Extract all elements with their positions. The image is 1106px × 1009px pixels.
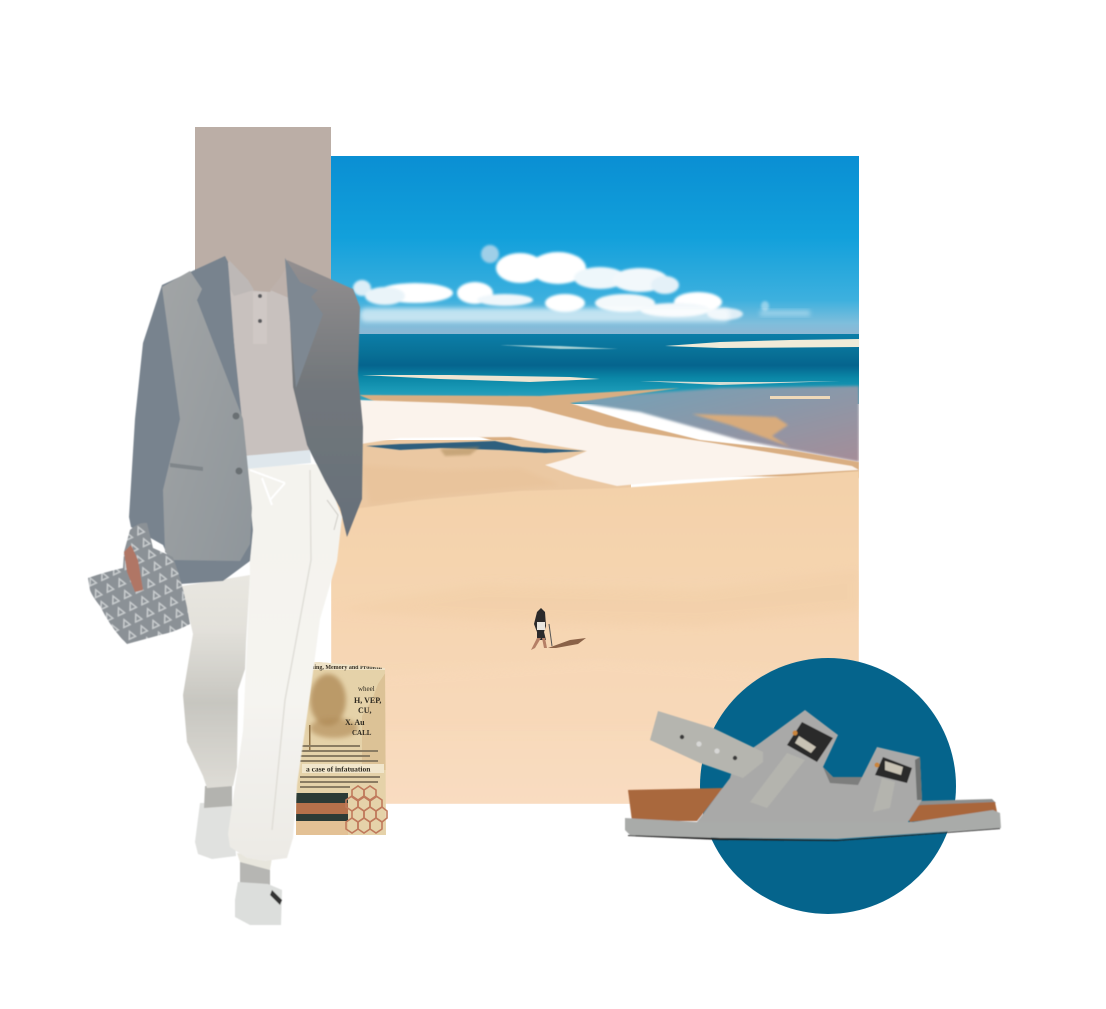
paper collage — [296, 660, 387, 836]
right blazer side — [287, 260, 363, 537]
front cork — [905, 802, 997, 822]
pants crease — [272, 470, 311, 830]
buckle two — [874, 757, 912, 783]
clipping text: ning, Memory and Problem — [311, 665, 382, 671]
white sand — [359, 400, 859, 486]
hiker — [531, 608, 586, 650]
shallow water — [560, 386, 859, 462]
polo collar — [228, 260, 289, 344]
low cloud band — [360, 301, 810, 322]
buttons — [232, 412, 242, 474]
left sandbar — [362, 375, 600, 382]
paper collage: X. Au — [345, 718, 365, 727]
main dune — [331, 471, 859, 804]
collage — [88, 127, 1002, 926]
left lapel — [197, 256, 238, 396]
right lapel — [285, 258, 323, 388]
beach photo — [331, 156, 859, 804]
strap two — [873, 778, 895, 812]
blazer left sleeve — [129, 256, 253, 584]
sole — [625, 810, 1001, 839]
sea — [331, 334, 859, 404]
back leg — [182, 575, 250, 788]
bag — [88, 523, 190, 644]
body — [534, 608, 546, 640]
honeycomb net — [346, 786, 387, 833]
paper collage: H, VEP, — [354, 696, 381, 705]
blue circle — [700, 658, 956, 914]
front leg — [228, 464, 342, 861]
paper collage: a case of infatuation — [306, 764, 371, 774]
footbed — [918, 799, 996, 808]
strap holes — [680, 735, 737, 760]
shadow — [548, 638, 586, 648]
tree — [310, 674, 358, 738]
front sock — [240, 860, 270, 888]
heel strap — [650, 711, 763, 778]
hand — [124, 545, 143, 592]
paper base — [296, 660, 387, 836]
blazer left panel — [162, 271, 252, 561]
paper collage: CALL — [352, 729, 372, 737]
tan shore — [359, 388, 859, 478]
back shoe — [195, 803, 236, 859]
figure — [88, 256, 363, 925]
paper collage: CU, — [358, 706, 372, 715]
inner dark edge — [823, 767, 862, 785]
tidal pool — [366, 441, 585, 453]
grid paper — [362, 672, 386, 770]
text lines — [300, 745, 380, 788]
front shoe — [235, 882, 282, 925]
sky — [331, 156, 859, 336]
pocket — [170, 463, 203, 471]
sandal — [625, 710, 1001, 841]
horizon island — [665, 339, 859, 348]
clouds — [353, 245, 743, 320]
paper collage: wheel — [358, 685, 375, 693]
buckle one — [787, 722, 833, 762]
dark bars — [296, 793, 348, 803]
waistband — [243, 449, 311, 469]
lower paper — [296, 821, 348, 836]
right sandbar — [640, 381, 840, 385]
felt upper — [697, 710, 922, 822]
polo shirt — [225, 262, 310, 456]
caption strip — [302, 764, 384, 773]
tan lower beach — [331, 440, 631, 512]
heel cork — [628, 788, 723, 821]
drawstring — [250, 470, 285, 505]
strap one — [750, 753, 805, 808]
front cuff — [237, 853, 272, 870]
beige rectangle — [195, 127, 331, 297]
back sock — [204, 785, 232, 808]
